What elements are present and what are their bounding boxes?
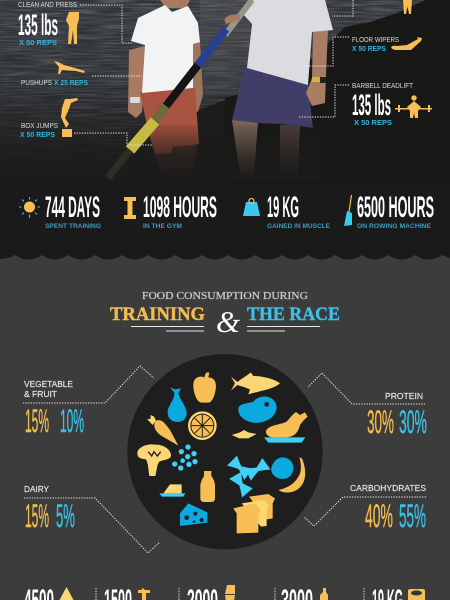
panel: vegetable and fruit: VEGETABLE [24,379,73,389]
icon: banana [278,457,305,492]
icon: roast chicken [264,412,308,443]
icon: butter [159,484,185,497]
infographic canvas: 744 DAYS [45,191,100,224]
stat: 1500 [104,584,150,600]
callout: top right exercise [332,0,412,16]
callout: floor wipers: FLOOR WIPERS [352,35,399,44]
icon: standing figure [403,0,412,14]
icon: box jump figure [61,98,78,128]
panel: dairy [24,484,75,534]
callout: barbell deadlift: X 50 REPS [354,118,392,127]
panel: protein: 30% [367,404,394,440]
callout: barbell deadlift [298,81,432,127]
icon: pushup figure [54,61,85,74]
icon: sun [19,197,40,218]
icon: pear [168,387,187,422]
callout: box jumps: BOX JUMPS [21,121,58,130]
icon: plum [271,457,293,479]
icon: berries [172,444,198,471]
icon: floor wipers figure [391,37,422,50]
icon: cheese [180,503,207,526]
stat: days spent training: SPENT TRAINING [45,223,101,230]
connector lines [23,366,426,553]
icon: bread [233,494,275,533]
stat: hours in the gym [124,191,217,230]
callout: floor wipers: X 50 REPS [352,44,386,53]
icon: fish [231,372,280,394]
icon: carrot [147,415,178,446]
icon: pasta [227,455,270,497]
heading word: the race: THE RACE [247,305,340,325]
icon: clean and press figure [66,12,79,44]
oar [108,0,252,178]
icon: weight [243,198,260,216]
callout: floor wipers [287,35,422,66]
callout: barbell deadlift: BARBELL DEADLIFT [352,81,413,90]
panel: vegetable and fruit: 15% [25,403,49,439]
icon: deadlift figure [395,95,432,118]
icon: orange slice [188,411,217,440]
chart: food plate circle [127,354,323,549]
stat: 19 KG [372,584,425,600]
stat: kilograms of muscle: 19 KG [267,191,299,224]
stat: hours in the gym: IN THE GYM [143,223,182,230]
infographic canvas: 10% [60,403,84,439]
stat: hours on rowing machine [344,191,434,230]
panel: dairy: 15% [25,498,49,534]
icon: gravy boat [232,430,257,438]
callout: box jumps: X 50 REPS [20,130,55,139]
callout: pushups [21,61,142,87]
stat: kilograms of muscle [243,191,331,230]
callout: clean and press: 135 lbs [18,9,58,42]
icon: dumbbell [124,197,136,219]
bottom stat row [24,584,425,600]
callout: clean and press: CLEAN AND PRESS [18,0,77,9]
callout: box jumps [20,98,152,145]
callout: clean and press: X 50 REPS [19,38,57,47]
panel: carbohydrates: CARBOHYDRATES [350,483,426,493]
panel: food section background with scalloped edge [0,255,450,600]
panel: carbohydrates: 40% [365,498,393,534]
heading: food consumption [110,291,340,339]
callout: pushups: PUSHUPS [21,78,52,87]
icon: milk bottle [200,471,215,502]
stat: hours on rowing machine: ON ROWING MACHINE [357,223,432,230]
callout: clean and press [18,0,132,47]
panel: vegetable and fruit: & FRUIT [24,389,57,399]
panel: dairy: DAIRY [24,484,49,494]
icon: oar blade [344,195,352,226]
heading: food consumption: FOOD CONSUMPTION DURING [142,291,308,302]
rower two [232,0,333,175]
icon: pepper [193,372,216,403]
infographic canvas: 1098 HOURS [143,191,217,224]
photo: water, rocks and rowers [0,0,450,185]
icon: cauliflower [137,444,171,476]
rower one [128,0,203,176]
panel: vegetable and fruit [24,379,84,439]
icon: box [62,129,72,137]
infographic canvas: 5% [56,498,75,534]
stat: days spent training [19,191,101,230]
heading word: training: TRAINING [110,305,205,325]
icon: steak [238,396,277,423]
panel: photo and training section background [0,0,450,262]
stat: kilograms of muscle: GAINED IN MUSCLE [267,223,331,230]
panel: protein: PROTEIN [385,391,423,401]
callout: pushups: X 25 REPS [54,78,88,87]
panel: carbohydrates [350,483,426,534]
ampersand: & [216,304,240,339]
